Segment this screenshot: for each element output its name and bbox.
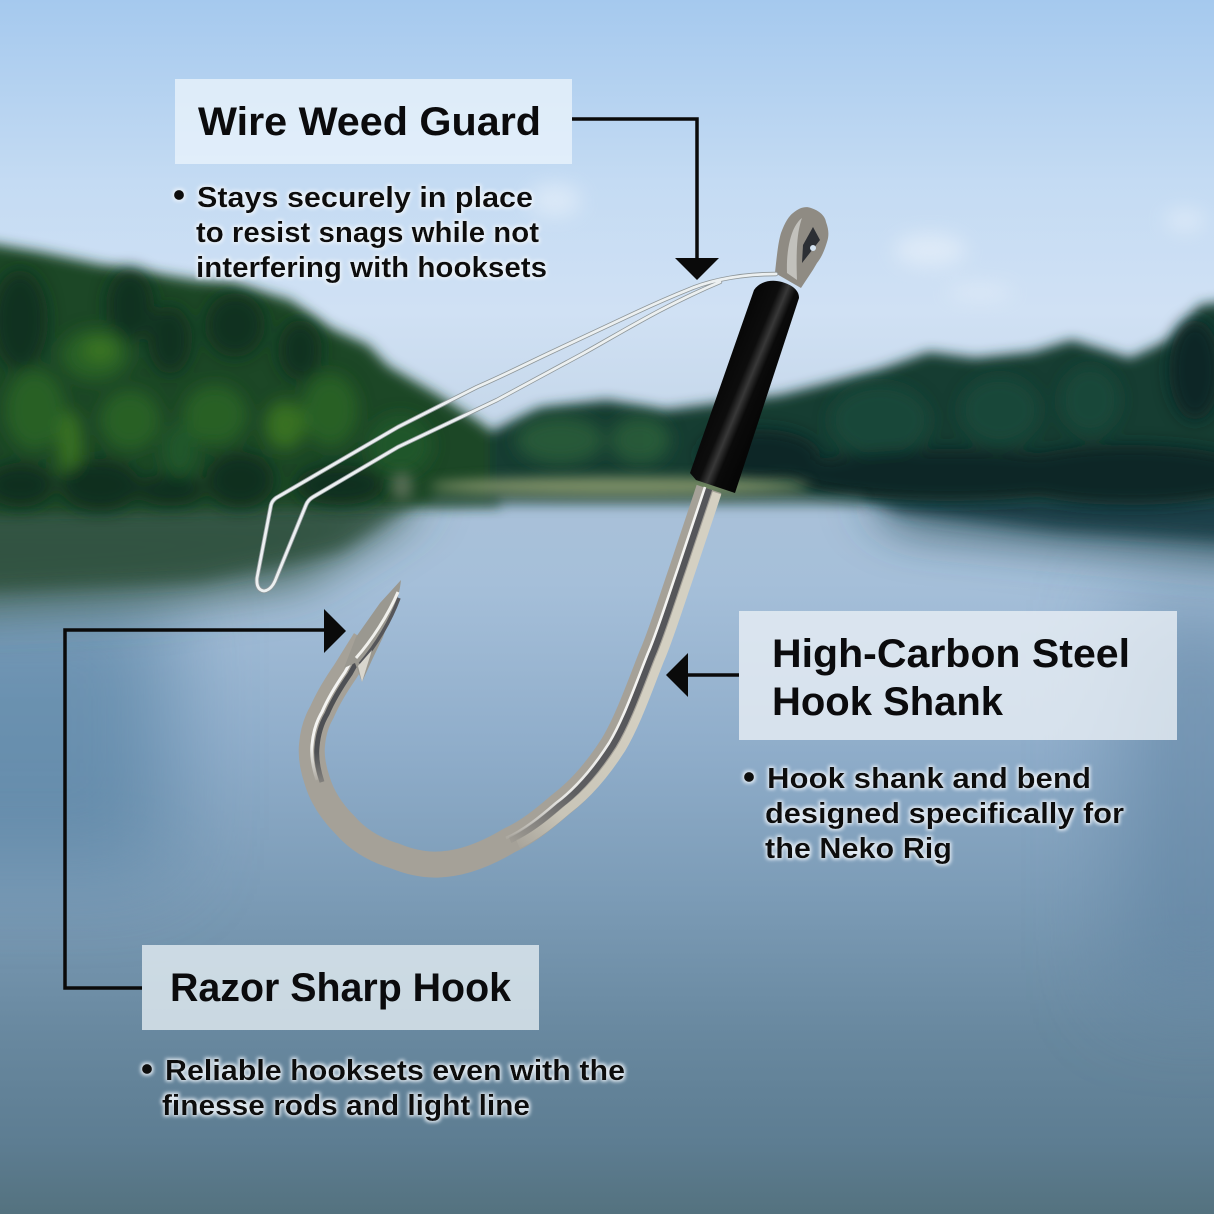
description: the Neko Rig [765,833,952,865]
wire weed guard [257,274,776,591]
arrow [666,653,739,697]
hook point and barb [344,580,401,682]
arrow [65,609,346,988]
tree line [0,240,1214,515]
water [0,498,1214,1214]
heading: Hook Shank [772,680,1004,724]
hook [257,207,828,865]
description [174,182,547,284]
right foliage [830,366,1120,456]
description: designed specifically for [765,798,1124,830]
callout box [739,611,1177,740]
heading: Wire Weed Guard [198,100,541,144]
shoreline [391,472,862,505]
callout box [142,945,539,1030]
description [142,1055,625,1122]
hook bend and shank [312,487,717,865]
heading [772,632,1130,724]
description: to resist snags while not [196,217,539,249]
arrow [572,119,719,280]
description: Reliable hooksets even with the [165,1055,625,1087]
left foliage [0,269,322,380]
middle foliage [516,416,670,464]
description: interfering with hooksets [196,252,547,284]
callout: razor sharp hook [65,609,625,1122]
description: Hook shank and bend [767,763,1091,795]
icon: hook eye [775,207,828,288]
callout: hook shank [666,611,1177,865]
black sleeve [690,281,799,493]
callout box [175,79,572,164]
heading: High-Carbon Steel [772,632,1130,676]
callout: wire weed guard [174,79,719,284]
sky [0,0,1214,520]
description [744,763,1124,865]
description: finesse rods and light line [162,1090,530,1122]
heading: Razor Sharp Hook [170,966,512,1010]
description: Stays securely in place [197,182,533,214]
